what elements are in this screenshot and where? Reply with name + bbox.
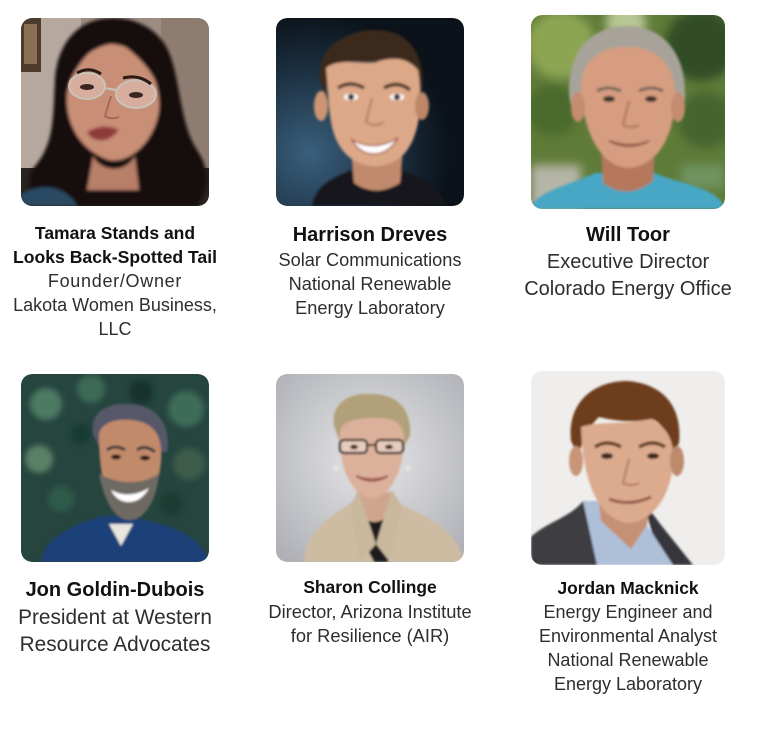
caption: Harrison Dreves: National Renewable [289, 274, 451, 294]
caption: Tamara Stands and Looks Back-Spotted Tail [13, 223, 217, 339]
caption: Jon Goldin-Dubois: President at Western [18, 606, 212, 629]
caption: Sharon Collinge: for Resilience (AIR) [291, 625, 449, 646]
caption: Jon Goldin-Dubois: Jon Goldin-Dubois [26, 579, 204, 601]
caption: Jon Goldin-Dubois [18, 579, 212, 656]
caption: Will Toor: Colorado Energy Office [524, 278, 732, 300]
photo: Harrison Dreves [276, 18, 464, 206]
caption: Tamara Stands and Looks Back-Spotted Tail: LLC [98, 319, 132, 339]
caption: Harrison Dreves [279, 224, 461, 318]
caption: Sharon Collinge: Sharon Collinge [303, 577, 437, 597]
caption: Tamara Stands and Looks Back-Spotted Tail: Founder/Owner [48, 271, 182, 291]
caption: Jon Goldin-Dubois: Resource Advocates [20, 633, 210, 656]
caption: Tamara Stands and Looks Back-Spotted Tail: Looks Back-Spotted Tail [13, 247, 217, 267]
photo: Jon Goldin-Dubois [21, 374, 209, 562]
photo: Will Toor [531, 15, 725, 209]
caption: Harrison Dreves: Harrison Dreves [293, 224, 447, 246]
caption: Jordan Macknick: Jordan Macknick [557, 578, 699, 598]
caption: Tamara Stands and Looks Back-Spotted Tail: Tamara Stands and [35, 223, 195, 243]
caption: Harrison Dreves: Solar Communications [279, 250, 461, 270]
caption: Jordan Macknick: Energy Laboratory [554, 674, 702, 694]
photo: Jordan Macknick [531, 371, 725, 565]
caption: Tamara Stands and Looks Back-Spotted Tail: Lakota Women Business, [13, 295, 217, 315]
photo: Tamara Stands and Looks Back-Spotted Tail [21, 18, 209, 206]
caption: Sharon Collinge: Director, Arizona Institute [268, 601, 472, 622]
caption: Jordan Macknick: Environmental Analyst [539, 626, 717, 646]
caption: Harrison Dreves: Energy Laboratory [295, 298, 445, 318]
caption: Will Toor [524, 224, 732, 300]
caption: Jordan Macknick: National Renewable [547, 650, 709, 670]
caption: Will Toor: Executive Director [547, 251, 709, 273]
photo: Sharon Collinge [276, 374, 464, 562]
caption: Sharon Collinge [268, 577, 472, 646]
caption: Will Toor: Will Toor [586, 224, 670, 246]
caption: Jordan Macknick: Energy Engineer and [543, 602, 713, 622]
caption: Jordan Macknick [539, 578, 717, 694]
